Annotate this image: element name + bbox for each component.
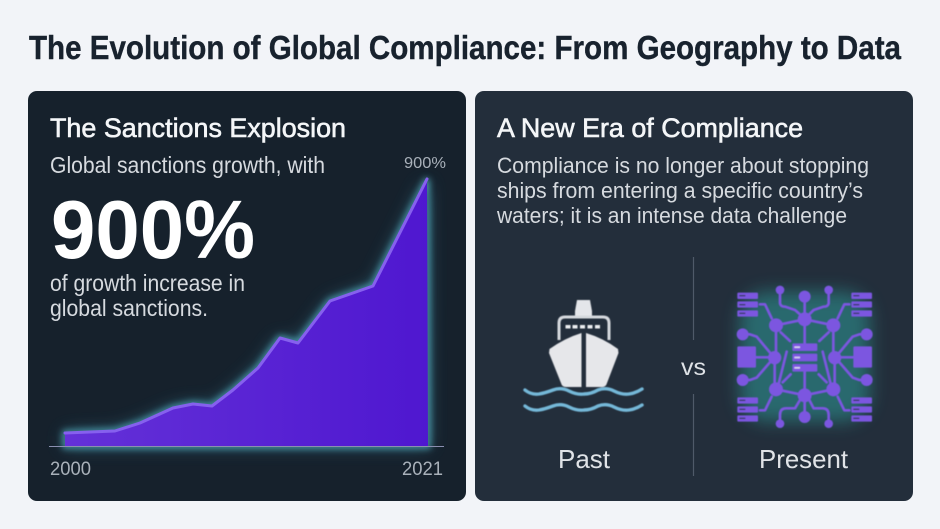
chart: sanctions growth area (49, 179, 444, 446)
heading: the sanctions explosion: The Sanctions Explosion (50, 113, 346, 143)
divider top (692, 257, 694, 340)
text: vs: vs (681, 354, 706, 380)
text: growth description (50, 270, 245, 321)
text: growth description: of growth increase in (50, 270, 245, 296)
big number: 900%: 900% (51, 183, 255, 276)
chart label: peak value: 900% (404, 155, 446, 172)
axis label: 2021: 2021 (402, 459, 443, 480)
axis label: 2000: 2000 (50, 459, 91, 480)
label: present: Present (759, 444, 849, 474)
text: compliance description: waters; it is an intense data challenge (496, 203, 847, 228)
text: compliance description: Compliance is no longer about stopping (497, 153, 869, 178)
label: past: Past (558, 444, 611, 474)
heading: a new era of compliance: A New Era of Compliance (497, 113, 803, 143)
panel: a new era of compliance (475, 91, 913, 501)
text: intro line: Global sanctions growth, with (50, 152, 325, 178)
icon: data network (737, 286, 873, 428)
text: compliance description: ships from entering a specific country’s (497, 178, 863, 203)
text: growth description: global sanctions. (50, 295, 208, 321)
divider bottom (692, 394, 694, 476)
icon: ship on waves (525, 300, 642, 410)
panel: the sanctions explosion (28, 91, 466, 501)
text: compliance description (496, 153, 869, 228)
